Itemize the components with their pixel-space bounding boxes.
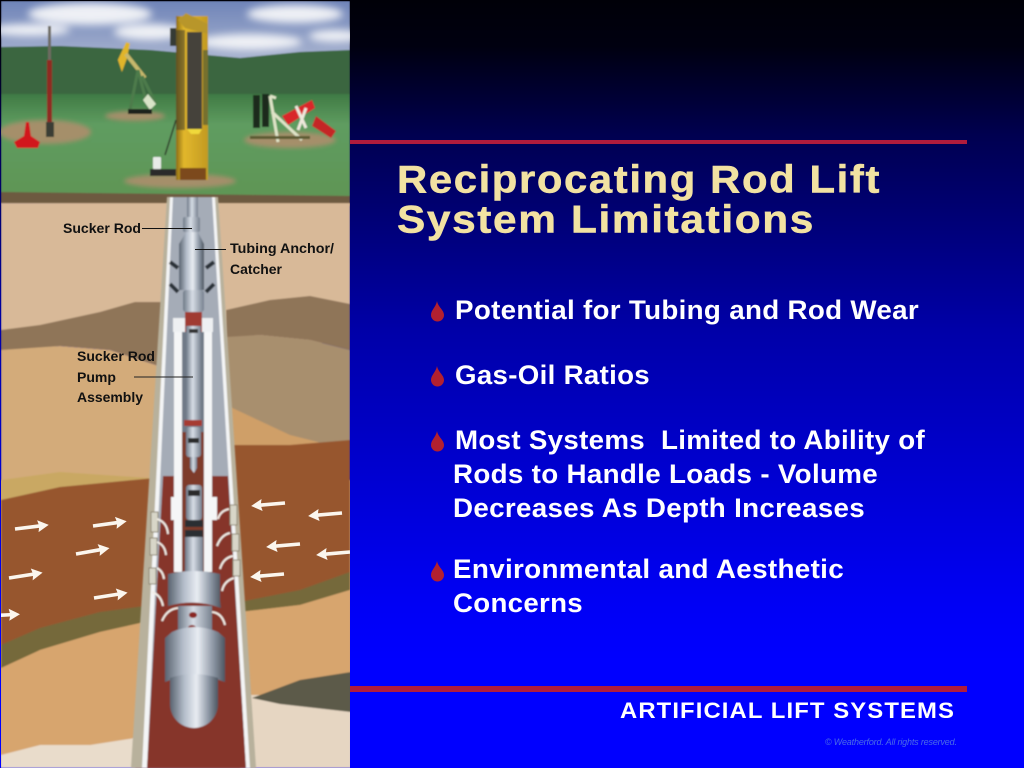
tubing interior [182, 431, 204, 530]
label: sucker rod pump assembly [77, 349, 193, 405]
label: sucker rod [63, 221, 192, 236]
surface scene: oil field [0, 1, 361, 206]
wellbore cross-section [131, 197, 256, 768]
label: tubing anchor/catcher: Tubing Anchor/ [230, 241, 334, 256]
label: sucker rod pump assembly: Sucker Rod [77, 349, 155, 364]
pale lower layer [240, 695, 351, 768]
bullet: environmental concerns [431, 554, 844, 618]
central yellow lift tower [150, 13, 208, 180]
bullet: rod load limits: Most Systems Limited to Ability of [455, 425, 926, 455]
bullet: gas-oil ratios: Gas-Oil Ratios [455, 360, 650, 390]
produced fluid [147, 476, 246, 768]
copyright: © Weatherford. All rights reserved. [825, 737, 957, 747]
formation inflow arrows [0, 497, 351, 622]
middle intake section [178, 606, 212, 636]
red wellhead rig [14, 26, 54, 148]
yellow transition [1, 472, 148, 500]
label: sucker rod pump assembly: Pump [77, 370, 116, 385]
lower gas anchor sleeve [165, 627, 225, 682]
pumpjack [120, 43, 156, 114]
bullet: environmental concerns: Environmental and Aesthetic [453, 554, 844, 584]
bullet: environmental concerns: Concerns [453, 588, 583, 618]
top red rule [350, 140, 967, 144]
bullet: rod load limits: Rods to Handle Loads - Volume [453, 459, 878, 489]
bottom red rule [350, 686, 967, 692]
upper gas anchor sleeve [168, 571, 221, 608]
standing valve [185, 485, 203, 573]
casing [142, 197, 250, 768]
illustration: artificial lift cross-section [0, 1, 361, 768]
ground surface edge [1, 192, 350, 206]
rod coupling [183, 217, 200, 232]
label: sucker rod: Sucker Rod [63, 221, 141, 236]
lower tan layer [1, 650, 38, 672]
dark wedge [252, 672, 351, 712]
sky with clouds [0, 1, 361, 61]
title [397, 158, 881, 242]
annulus grey [147, 197, 246, 768]
right olive layer [226, 335, 350, 445]
sucker rod [187, 197, 198, 219]
hills [1, 46, 350, 100]
right horizontal lift unit [250, 94, 336, 142]
title: Reciprocating Rod Lift [397, 158, 881, 202]
tubing anchor [179, 232, 204, 290]
bullet: rod load limits [431, 425, 926, 523]
upper coupling [183, 290, 204, 312]
bullet: rod load limits: Decreases As Depth Increases [453, 493, 865, 523]
left tan layer [1, 346, 165, 480]
drilling pads [0, 111, 336, 188]
cement sheath [131, 197, 256, 768]
yellow fringe below oil layer [1, 572, 350, 672]
upper sand layer [1, 203, 350, 343]
pump barrel [186, 326, 201, 420]
footer title: ARTIFICIAL LIFT SYSTEMS [620, 698, 955, 723]
curved fluid-flow arrows [152, 509, 234, 625]
bull plug [170, 674, 218, 728]
label: tubing anchor/catcher [195, 241, 334, 277]
oil-bearing brown layer [1, 440, 350, 660]
strata base [0, 480, 351, 768]
bullet: tubing and rod wear: Potential for Tubing and Rod Wear [455, 295, 919, 325]
tubing walls [178, 322, 208, 572]
grey-brown band [1, 296, 350, 368]
travelling valve [184, 420, 202, 473]
title: System Limitations [397, 198, 815, 242]
icon: oil drop [431, 301, 444, 322]
geological strata [0, 203, 351, 768]
label: sucker rod pump assembly: Assembly [77, 390, 143, 405]
icon: oil drop [431, 366, 444, 386]
label: tubing anchor/catcher: Catcher [230, 262, 283, 277]
casing perforations [149, 505, 240, 584]
icon: oil drop [431, 431, 444, 452]
grass field [1, 94, 350, 196]
icon: oil drop [431, 561, 444, 582]
